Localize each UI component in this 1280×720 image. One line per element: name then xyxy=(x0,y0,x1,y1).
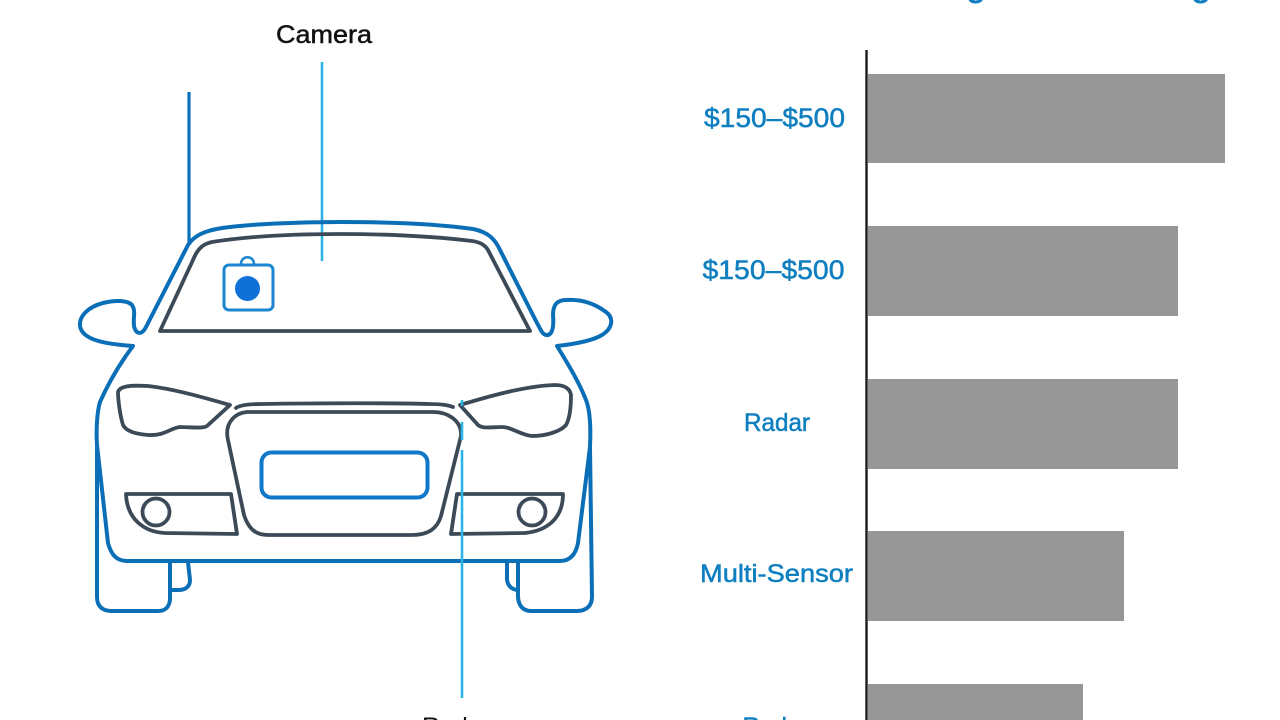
right fog lamp xyxy=(451,494,563,534)
label: Camera: Camera xyxy=(276,21,372,49)
bar chart: sensor price ranges xyxy=(700,50,1225,720)
license plate xyxy=(262,452,428,498)
bar 4 xyxy=(868,531,1124,621)
leader line: radar xyxy=(461,400,463,698)
panel: car diagram xyxy=(80,21,611,720)
bar 2 xyxy=(868,226,1178,316)
label: bar 4: Multi-Sensor xyxy=(700,560,853,588)
left headlight xyxy=(118,386,230,435)
label: bar 1: $150–$500 xyxy=(704,103,845,133)
right headlight xyxy=(460,385,571,436)
front left wheel xyxy=(97,445,190,611)
windshield xyxy=(160,234,530,331)
front right wheel xyxy=(507,447,592,611)
car body outline xyxy=(80,222,611,561)
front grille xyxy=(227,412,461,535)
hood line xyxy=(236,403,453,408)
leader line: camera xyxy=(321,62,323,261)
bar 5 xyxy=(868,684,1083,720)
chart axis xyxy=(865,50,868,720)
left fog lamp xyxy=(126,494,237,534)
bar 3 xyxy=(868,379,1178,469)
label: bar 3: Radar xyxy=(744,409,810,437)
chart heading, cropped at top edge xyxy=(966,0,1211,4)
leader line: left pillar sensor xyxy=(187,92,191,243)
label: bar 2: $150–$500 xyxy=(702,255,844,285)
bar 1 xyxy=(868,74,1225,163)
icon: camera xyxy=(224,257,273,310)
